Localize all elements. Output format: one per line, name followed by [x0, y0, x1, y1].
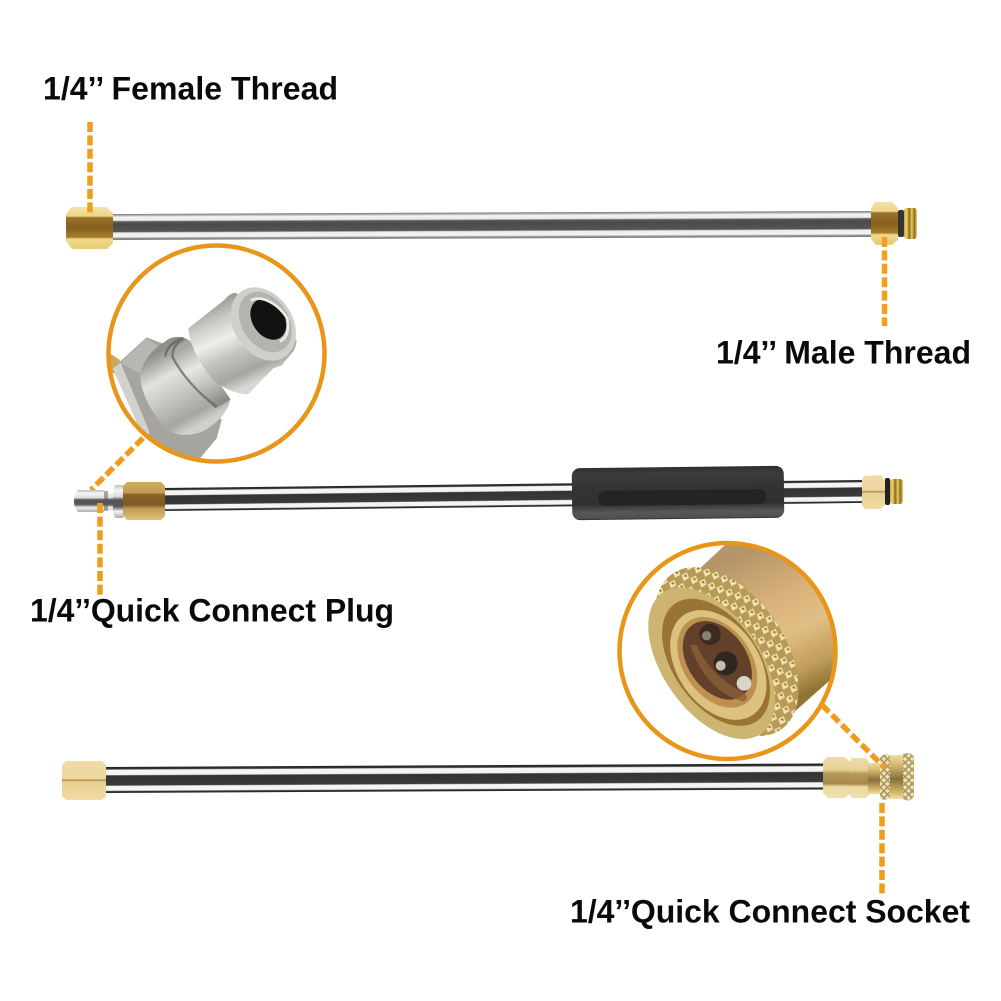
wand 2 rubber grip [572, 466, 784, 520]
wand 2 steel tube [160, 480, 865, 511]
wand 3 steel tube [102, 763, 825, 793]
leader: socket callout to socket [822, 705, 885, 768]
wand 2 male thread [885, 478, 903, 505]
wand 2: handled lance [74, 466, 903, 520]
leader: female thread [87, 122, 93, 213]
wand 1: straight extension [66, 202, 917, 249]
leader: male thread [882, 237, 887, 326]
callout: quick connect plug close-up [108, 246, 324, 462]
wand 3 socket coupler [823, 753, 914, 800]
wand 2 collar [113, 485, 123, 518]
wand 2 right nut [862, 475, 885, 509]
label: quick connect plug: 1/4’’Quick Connect Plug [30, 592, 394, 628]
wand 2 plug tip [74, 490, 113, 512]
wand 3: socket extension [62, 753, 914, 800]
orange ring 1 [108, 246, 324, 462]
wand 1 male hex nut [871, 202, 898, 245]
wand 3 female nut [62, 761, 106, 800]
leader: plug [97, 503, 103, 595]
wand 1 steel tube [110, 211, 872, 240]
label: male thread: 1/4’’ Male Thread [716, 334, 971, 370]
plug photo illustration [110, 275, 309, 458]
socket photo illustration [648, 545, 834, 740]
wand 2 brass nut [123, 482, 165, 520]
orange ring 2 [620, 543, 836, 759]
callout: quick connect socket close-up [620, 541, 843, 762]
wand 1 male thread [898, 208, 917, 239]
label: quick connect socket: 1/4’’Quick Connect Socket [570, 894, 970, 930]
label: female thread: 1/4’’ Female Thread [43, 70, 338, 106]
wand 1 female hex nut [66, 207, 113, 249]
leader: plug callout to plug [91, 438, 143, 490]
leader: socket [879, 803, 885, 895]
